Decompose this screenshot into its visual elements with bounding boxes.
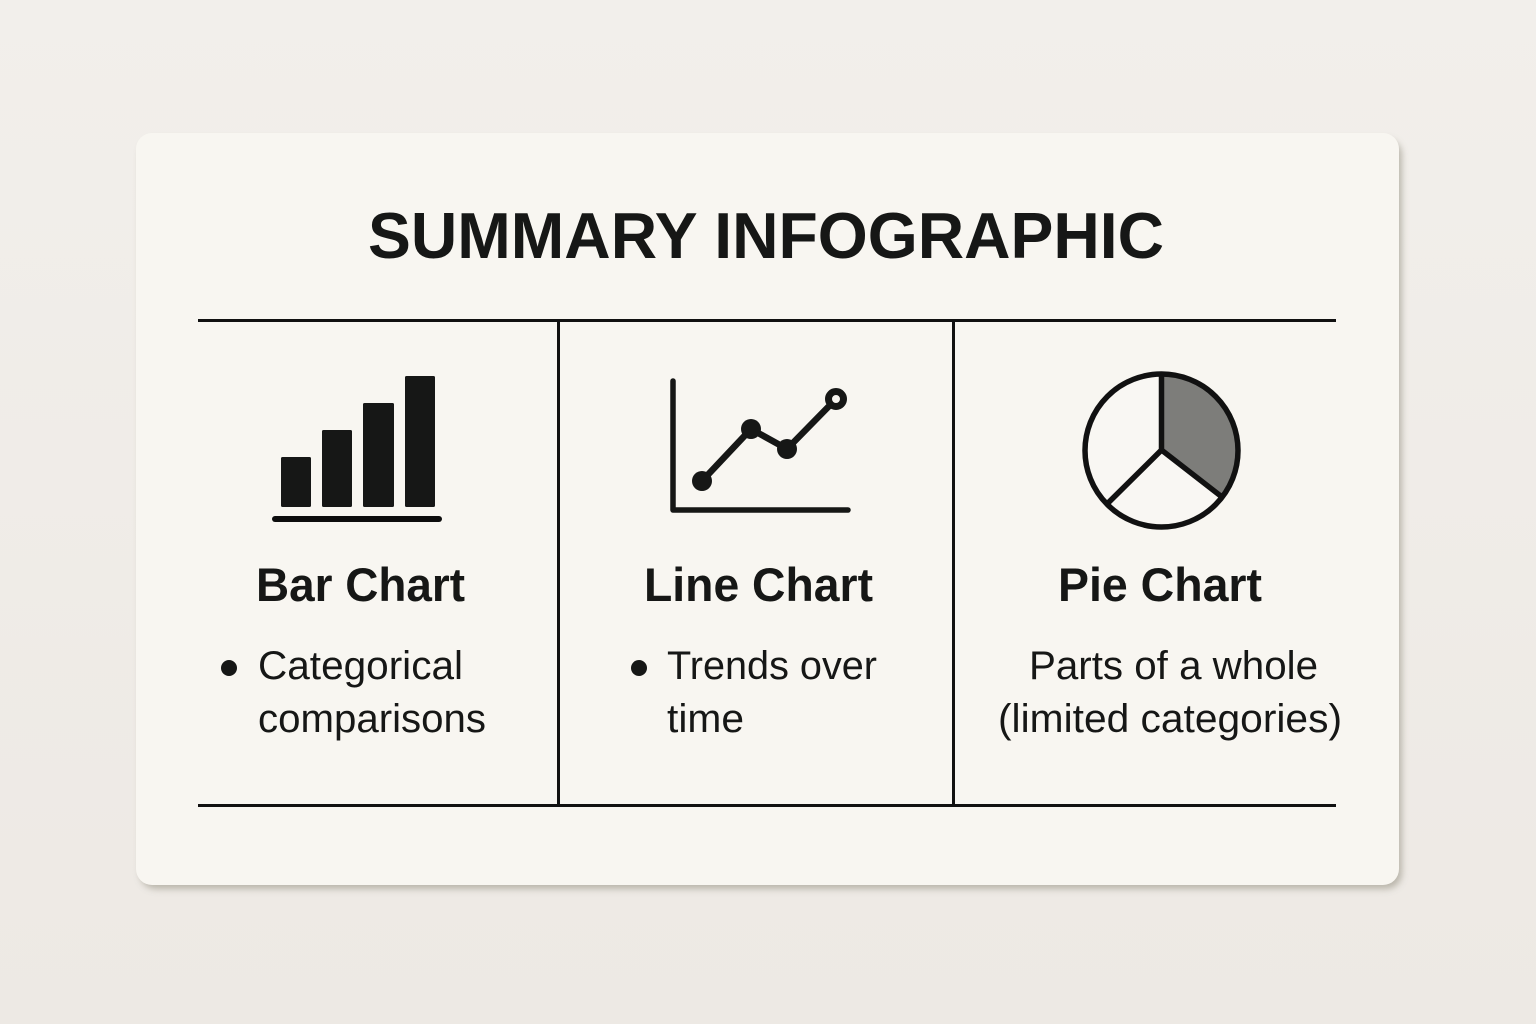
text: bar chart description: Categorical <box>258 644 463 688</box>
title: SUMMARY INFOGRAPHIC <box>368 199 1164 272</box>
card shadow <box>140 139 1402 889</box>
icon: pie chart <box>1085 374 1238 527</box>
text: pie chart description: Parts of a whole <box>1029 644 1318 688</box>
icon: line chart <box>673 381 848 510</box>
text: line chart description: Trends over <box>667 644 877 688</box>
text: pie chart description <box>998 644 1342 741</box>
panel: line chart column <box>631 381 877 741</box>
heading: bar chart: Bar Chart <box>256 558 465 611</box>
text: line chart description <box>631 644 877 741</box>
text: bar chart description: comparisons <box>258 697 486 741</box>
text: line chart description: time <box>667 697 744 741</box>
text: pie chart description: (limited categories) <box>998 697 1342 741</box>
panel: bar chart column <box>221 376 486 741</box>
panel: pie chart column <box>998 374 1342 741</box>
heading: line chart: Line Chart <box>644 558 873 611</box>
table rules <box>198 320 1336 806</box>
heading: pie chart: Pie Chart <box>1058 558 1262 611</box>
panel: summary card <box>136 133 1399 885</box>
icon: bar chart <box>272 376 442 522</box>
text: bar chart description <box>221 644 486 741</box>
